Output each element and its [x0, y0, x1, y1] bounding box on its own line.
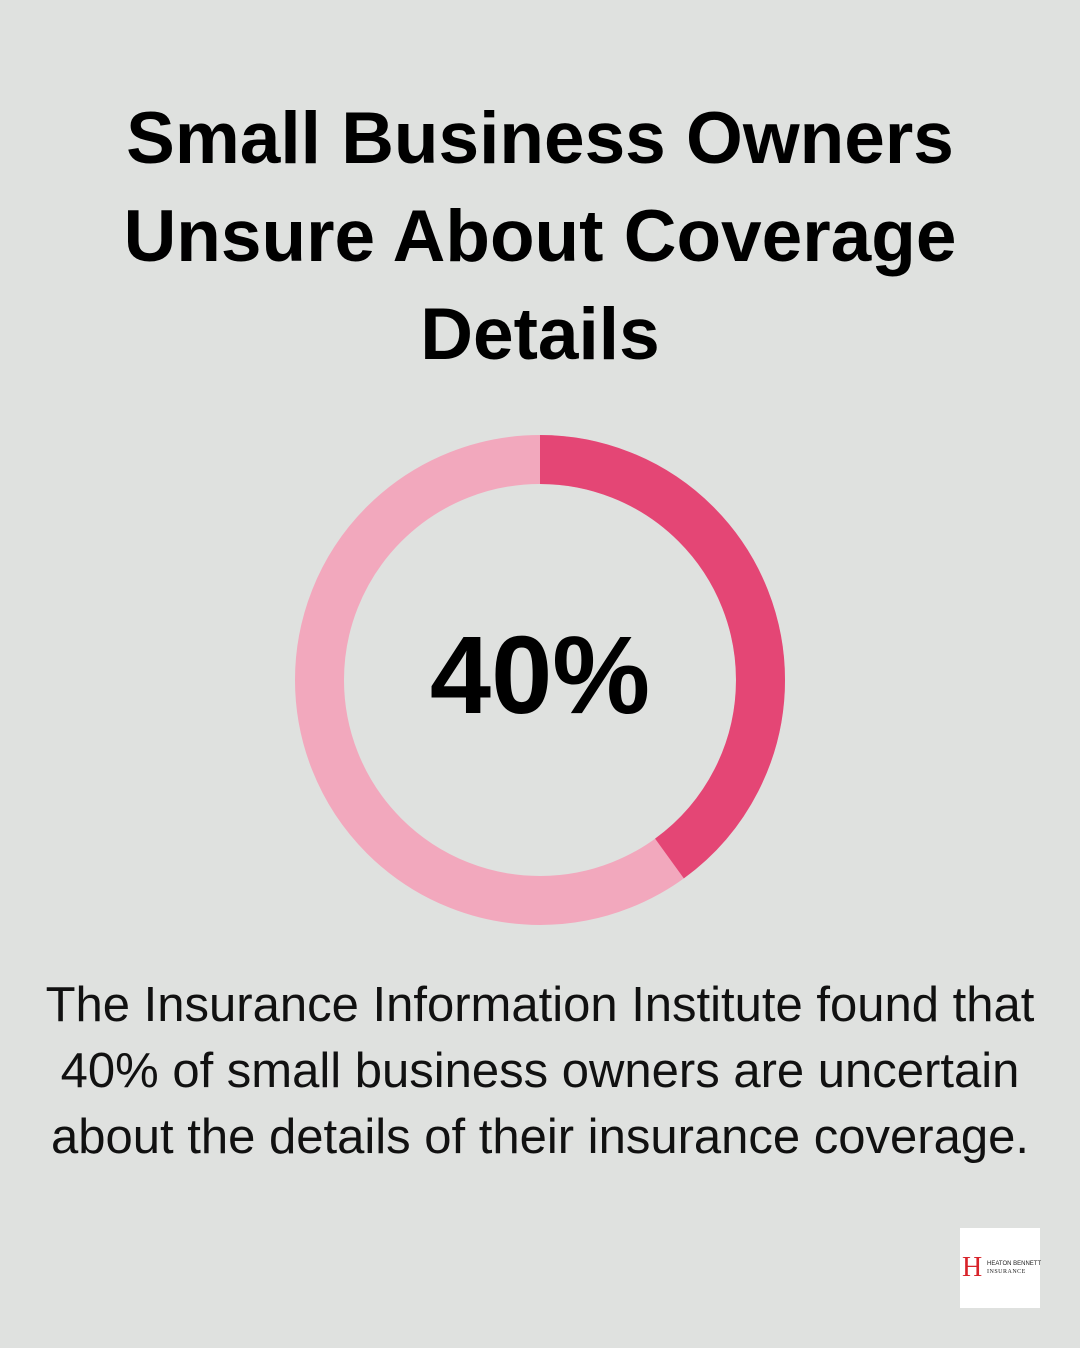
- logo: INSURANCE: [987, 1269, 1026, 1275]
- body text: The Insurance Information Institute found that: [46, 978, 1034, 1032]
- title: [124, 98, 956, 375]
- title: Small Business Owners: [126, 98, 954, 179]
- title: Unsure About Coverage: [124, 196, 956, 277]
- logo: H: [962, 1252, 982, 1283]
- body text: [46, 978, 1034, 1164]
- donut chart: 40%: [430, 614, 650, 737]
- logo: HEATON BENNETT: [987, 1261, 1041, 1267]
- title: Details: [420, 294, 660, 375]
- logo: [960, 1228, 1040, 1308]
- body text: about the details of their insurance coverage.: [51, 1110, 1029, 1164]
- body text: 40% of small business owners are uncertain: [61, 1044, 1019, 1098]
